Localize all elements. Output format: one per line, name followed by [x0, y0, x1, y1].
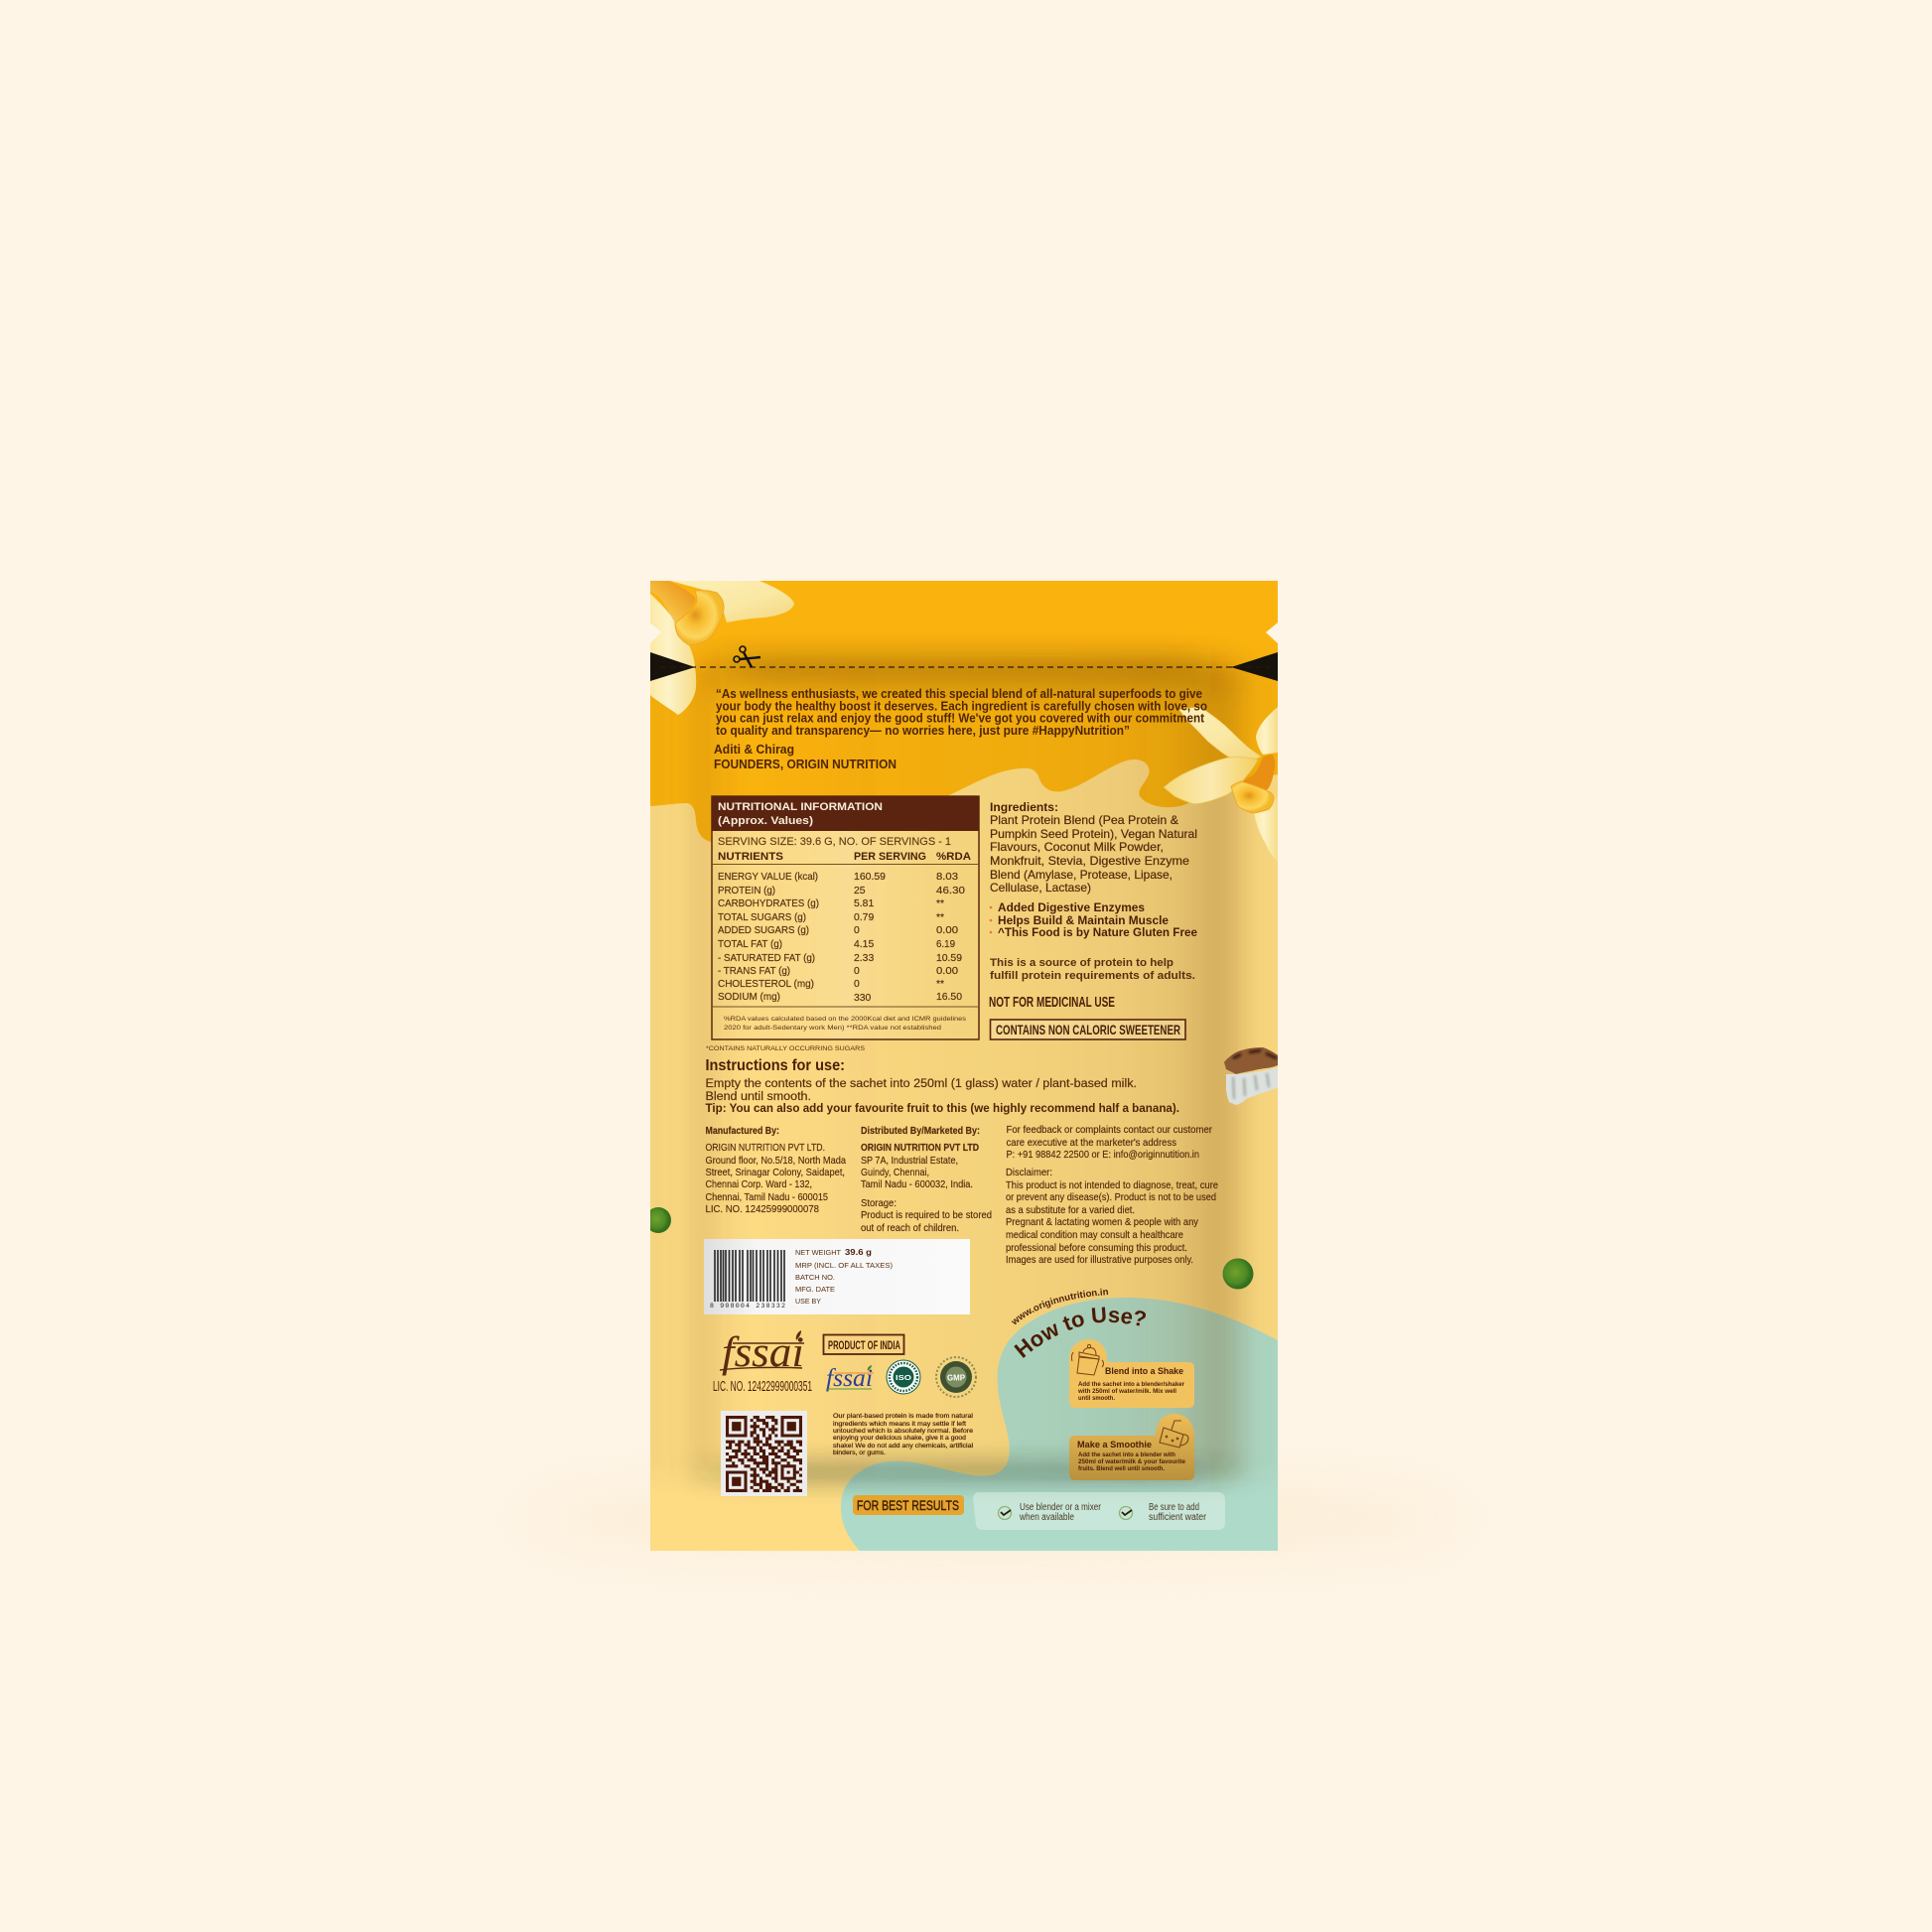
nutrient rows: 4.15 — [854, 939, 874, 950]
nutrient rows: PROTEIN (g) — [718, 886, 775, 897]
nutrient rows: 0.00 — [936, 925, 958, 936]
feedback block: For feedback or complaints contact our customer — [1007, 1125, 1212, 1136]
label fields — [795, 1247, 893, 1306]
barcode: 8 908004 238332 — [710, 1303, 785, 1310]
label fields: USE BY — [795, 1297, 821, 1306]
benefit bullets — [990, 900, 1197, 939]
storage block — [861, 1198, 992, 1234]
column heads: %RDA — [936, 851, 971, 863]
nutrient rows: ADDED SUGARS (g) — [718, 925, 809, 936]
not for medicinal use: NOT FOR MEDICINAL USE — [989, 994, 1115, 1011]
disclaimer block: or prevent any disease(s). Product is not to be used — [1006, 1192, 1216, 1203]
panel: make a smoothie: fruits. Blend well until smooth. — [1078, 1465, 1165, 1472]
nutrient rows: ENERGY VALUE (kcal) — [718, 872, 818, 883]
natural settling note: binders, or gums. — [833, 1449, 886, 1456]
nutrient rows: 330 — [854, 993, 872, 1004]
founders quote: to quality and transparency— no worries here, just pure #HappyNutrition” — [716, 724, 1130, 738]
nutrient rows: 25 — [854, 886, 866, 897]
ingredients: Pumpkin Seed Protein), Vegan Natural — [990, 827, 1197, 841]
nutrient rows: 0 — [854, 966, 860, 977]
ingredients: Cellulase, Lactase) — [990, 881, 1091, 895]
tip two — [1149, 1502, 1207, 1523]
ground shadow — [516, 1479, 1469, 1559]
nutrient rows: 46.30 — [936, 886, 965, 897]
ingredients: Blend (Amylase, Protease, Lipase, — [990, 868, 1173, 882]
storage block: Product is required to be stored — [861, 1210, 992, 1221]
disclaimer block: Images are used for illustrative purposes only. — [1006, 1255, 1193, 1266]
pillow shading — [650, 637, 1278, 1497]
nutrient rows: 6.19 — [936, 939, 955, 950]
protein source claim: fulfill protein requirements of adults. — [990, 970, 1195, 982]
petal orange — [650, 581, 695, 623]
ingredients: Plant Protein Blend (Pea Protein & — [990, 813, 1178, 827]
product of india box: PRODUCT OF INDIA — [828, 1340, 900, 1352]
ingredients: Monkfruit, Stevia, Digestive Enzyme — [990, 854, 1189, 868]
protein source claim — [990, 957, 1195, 982]
feedback block: P: +91 98842 22500 or E: info@originnutition.in — [1007, 1150, 1199, 1161]
nutrient rows: 8.03 — [936, 872, 958, 883]
benefit bullets: Helps Build & Maintain Muscle — [998, 913, 1169, 927]
icon: pea left — [650, 1207, 671, 1233]
natural settling note: ingredients which means it may settle if left — [833, 1421, 966, 1428]
fssai logo large: fssai — [722, 1329, 804, 1376]
petal top right — [670, 581, 794, 622]
nutrient rows: 2.33 — [854, 953, 874, 964]
ingredients — [990, 800, 1197, 895]
badge: GMP — [936, 1357, 976, 1397]
badge: GMP: GMP — [947, 1374, 966, 1382]
feedback block — [1007, 1125, 1212, 1161]
instructions: Empty the contents of the sachet into 250ml (1 glass) water / plant-based milk. — [705, 1076, 1137, 1090]
distributor block — [861, 1126, 980, 1190]
protein source claim: This is a source of protein to help — [990, 957, 1173, 969]
manufacturer block: Street, Srinagar Colony, Saidapet, — [705, 1168, 845, 1178]
fssai logo small: fssai — [826, 1365, 873, 1392]
icon: check one — [999, 1507, 1011, 1519]
badge: ISO certified: ISO — [896, 1373, 911, 1382]
nutrient rows: TOTAL FAT (g) — [718, 939, 782, 950]
column heads: PER SERVING — [854, 851, 926, 863]
storage block: Storage: — [861, 1198, 897, 1209]
panel: make a smoothie: 250ml of water/milk & your favourite — [1078, 1458, 1185, 1465]
website arc: www.originnutrition.in — [1011, 1289, 1108, 1324]
panel: nutrition table — [711, 796, 979, 1039]
barcode — [710, 1250, 785, 1310]
instructions: Instructions for use: — [705, 1057, 845, 1074]
nutrient rows: 0.79 — [854, 912, 874, 923]
table footnote: %RDA values calculated based on the 2000Kcal diet and ICMR guidelines — [724, 1016, 967, 1023]
chocolate cup — [1224, 1047, 1278, 1105]
tip two: sufficient water — [1149, 1512, 1207, 1523]
trumpet frill — [675, 591, 724, 645]
distributor block: Tamil Nadu - 600032, India. — [861, 1179, 973, 1190]
pouch base orange — [650, 581, 1278, 842]
benefit bullets: ^This Food is by Nature Gluten Free — [998, 925, 1197, 939]
natural settling note: Our plant-based protein is made from natural — [833, 1413, 973, 1420]
manufacturer block: Ground floor, No.5/18, North Mada — [705, 1156, 846, 1167]
distributor block: Guindy, Chennai, — [861, 1168, 929, 1178]
petal top right — [1256, 707, 1278, 755]
tip one — [1019, 1502, 1102, 1523]
label fields: 39.6 g — [845, 1247, 872, 1257]
distributor block: Distributed By/Marketed By: — [861, 1126, 980, 1137]
distributor block: ORIGIN NUTRITION PVT LTD — [861, 1143, 979, 1154]
for best results pill — [853, 1495, 964, 1515]
disclaimer block — [1006, 1168, 1218, 1266]
petal lower left — [650, 594, 696, 715]
label fields: MRP (INCL. OF ALL TAXES) — [795, 1261, 893, 1270]
disclaimer block: professional before consuming this product. — [1006, 1243, 1187, 1254]
founders signature: FOUNDERS, ORIGIN NUTRITION — [714, 758, 897, 771]
table footnote — [724, 1016, 967, 1032]
panel: make a smoothie: Make a Smoothie — [1077, 1440, 1152, 1450]
table footnote: 2020 for adult-Sedentary work Men) **RDA value not established — [724, 1025, 941, 1032]
natural settling note: enjoying your delicious shake, give it a good — [833, 1435, 966, 1442]
nutrient rows: - TRANS FAT (g) — [718, 966, 790, 977]
yellow wave region — [650, 759, 1278, 1551]
manufacturer block — [705, 1126, 846, 1215]
nutrient rows: 0.00 — [936, 966, 958, 977]
nutrient rows: TOTAL SUGARS (g) — [718, 912, 806, 923]
panel: blend into a shake: with 250ml of water/milk. Mix well — [1077, 1388, 1176, 1395]
nutrient rows: 16.50 — [936, 992, 962, 1003]
natural settling note: shake! We do not add any chemicals, artificial — [833, 1443, 973, 1449]
founders quote — [716, 687, 1207, 738]
fssai logo large — [713, 1329, 812, 1395]
nutrient rows: 160.59 — [854, 872, 886, 883]
teal how-to-use region — [841, 1298, 1278, 1551]
benefit bullets: Added Digestive Enzymes — [998, 900, 1145, 914]
fssai logo large: LIC. NO. 12422999000351 — [713, 1378, 812, 1395]
table header — [711, 796, 979, 831]
natural settling note — [833, 1413, 973, 1456]
nutrient rows — [718, 872, 965, 1004]
instructions — [705, 1057, 1179, 1115]
how to use heading: How to Use? — [1014, 1307, 1146, 1358]
petal left — [1164, 758, 1258, 804]
founders quote: your body the healthy boost it deserves. Each ingredient is carefully chosen with love, so — [716, 699, 1207, 713]
label fields: BATCH NO. — [795, 1273, 835, 1282]
panel: blend into a shake — [1069, 1339, 1194, 1408]
tear line — [660, 666, 1271, 668]
distributor block: SP 7A, Industrial Estate, — [861, 1156, 958, 1167]
disclaimer block: This product is not intended to diagnose, treat, cure — [1006, 1180, 1218, 1191]
nutrient rows: - SATURATED FAT (g) — [718, 953, 815, 964]
disclaimer block: as a substitute for a varied diet. — [1006, 1205, 1135, 1216]
ingredients: Ingredients: — [990, 800, 1058, 814]
icon: check two — [1120, 1507, 1132, 1519]
serving size: SERVING SIZE: 39.6 G, NO. OF SERVINGS - 1 — [718, 836, 951, 848]
QR code — [721, 1411, 807, 1496]
petal lower right — [1254, 797, 1278, 862]
panel: best result tips — [973, 1492, 1225, 1530]
founders signature — [714, 743, 897, 771]
icon: shaker — [1071, 1344, 1104, 1375]
panel: barcode label — [704, 1239, 970, 1314]
throat — [1241, 755, 1275, 791]
flower: top left — [650, 581, 794, 715]
table header: NUTRITIONAL INFORMATION — [718, 801, 883, 813]
ingredients: Flavours, Coconut Milk Powder, — [990, 840, 1164, 854]
panel: make a smoothie: Add the sachet into a blender with — [1078, 1451, 1175, 1458]
tear notch triangles — [650, 652, 1278, 681]
instructions: Tip: You can also add your favourite fruit to this (we highly recommend half a banana). — [705, 1101, 1179, 1115]
peas and chocolate garnish — [645, 1047, 1278, 1289]
manufacturer block: LIC. NO. 12425999000078 — [705, 1204, 819, 1215]
manufacturer block: ORIGIN NUTRITION PVT LTD. — [705, 1143, 825, 1154]
tip one: when available — [1019, 1512, 1074, 1523]
founders quote: “As wellness enthusiasts, we created this special blend of all-natural superfoods to give — [716, 687, 1202, 701]
sweetener box: CONTAINS NON CALORIC SWEETENER — [996, 1022, 1180, 1037]
column heads: NUTRIENTS — [718, 851, 783, 863]
feedback block: care executive at the marketer's address — [1007, 1138, 1176, 1149]
nutrient rows: ** — [936, 979, 944, 990]
petal upper — [1179, 708, 1261, 759]
instructions: Blend until smooth. — [705, 1089, 811, 1103]
icon: jar — [1160, 1421, 1188, 1448]
sweetener box — [991, 1020, 1185, 1039]
pouch body — [645, 581, 1278, 1551]
label fields: NET WEIGHT — [795, 1248, 841, 1257]
manufacturer block: Chennai, Tamil Nadu - 600015 — [705, 1192, 828, 1203]
tip two: Be sure to add — [1149, 1502, 1199, 1513]
panel: blend into a shake: Blend into a Shake — [1105, 1366, 1183, 1377]
natural settling note: untouched which is absolutely normal. Before — [833, 1428, 973, 1435]
manufacturer block: Chennai Corp. Ward - 132, — [705, 1179, 812, 1190]
nutrient rows: ** — [936, 912, 944, 923]
tip one: Use blender or a mixer — [1020, 1502, 1102, 1513]
trumpet frill — [1231, 781, 1274, 813]
panel: blend into a shake: Add the sachet into a blender/shaker — [1078, 1381, 1184, 1388]
panel: make a smoothie — [1069, 1414, 1194, 1480]
disclaimer block: Disclaimer: — [1006, 1168, 1052, 1178]
flower: right — [1164, 707, 1278, 862]
founders signature: Aditi & Chirag — [714, 743, 794, 757]
disclaimer block: medical condition may consult a healthcare — [1006, 1230, 1183, 1241]
storage block: out of reach of children. — [861, 1223, 959, 1234]
nutrient rows: CHOLESTEROL (mg) — [718, 979, 814, 990]
for best results pill: FOR BEST RESULTS — [857, 1497, 959, 1513]
nutrient rows: 0 — [854, 979, 860, 990]
column heads — [718, 851, 971, 863]
nutrient rows: CARBOHYDRATES (g) — [718, 898, 819, 909]
nutrient rows: SODIUM (mg) — [718, 992, 780, 1003]
manufacturer block: Manufactured By: — [705, 1126, 779, 1137]
nutrient rows: 0 — [854, 925, 860, 936]
disclaimer block: Pregnant & lactating women & people with any — [1006, 1217, 1199, 1228]
label fields: MFG. DATE — [795, 1285, 835, 1294]
panel: blend into a shake: until smooth. — [1078, 1395, 1115, 1402]
icon: scissors — [734, 646, 760, 667]
nutrient rows: ** — [936, 898, 944, 909]
product of india box — [824, 1334, 903, 1354]
founders quote: you can just relax and enjoy the good stuff! We've got you covered with our commitment — [716, 711, 1205, 725]
table header: (Approx. Values) — [718, 815, 813, 827]
sugars footnote: *CONTAINS NATURALLY OCCURRING SUGARS — [706, 1045, 865, 1052]
nutrient rows: 5.81 — [854, 898, 874, 909]
nutrient rows: 10.59 — [936, 953, 962, 964]
icon: pea right — [1223, 1259, 1253, 1289]
badge: ISO certified — [887, 1360, 920, 1394]
